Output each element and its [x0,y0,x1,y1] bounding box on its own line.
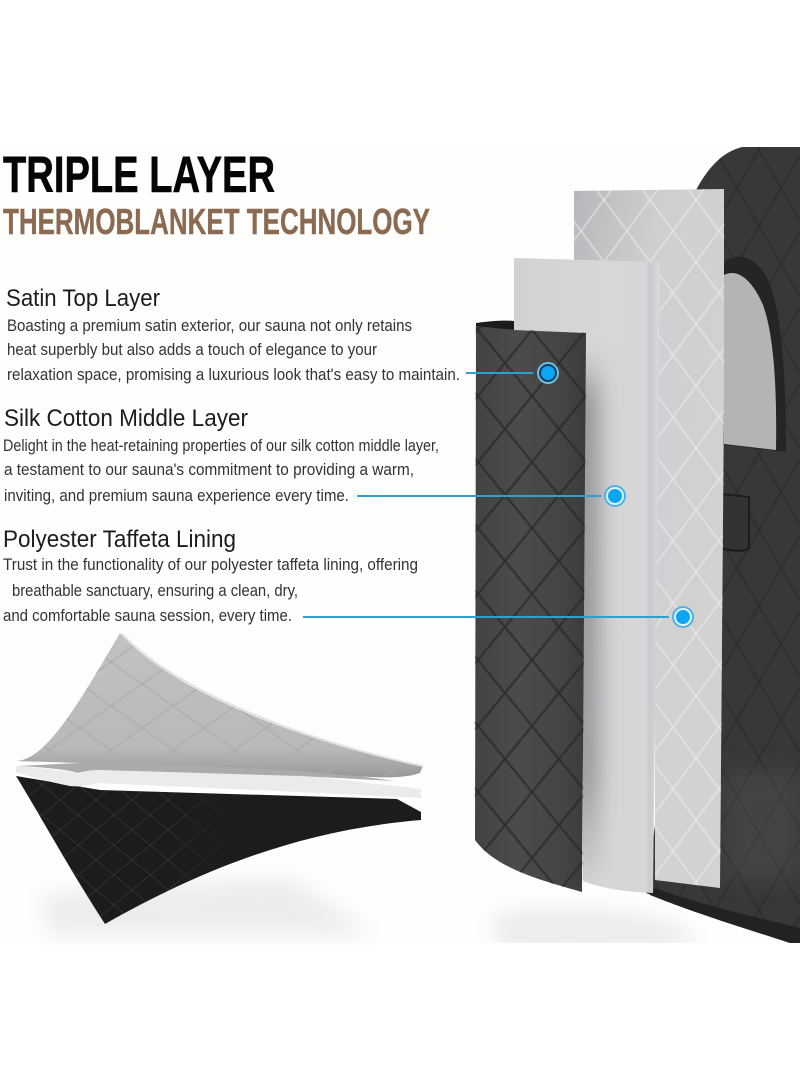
description: silk cotton middle layer: Delight in the heat-retaining properties of our silk cotton middle layer, [3,436,439,455]
fabric sheet: black lining [16,776,421,924]
description: satin top layer: Boasting a premium satin exterior, our sauna not only retains [7,316,412,335]
description: polyester taffeta lining: and comfortable sauna session, every time. [3,606,292,625]
shadow under fabric [40,878,375,935]
floor shadow [494,907,688,943]
subtitle: THERMOBLANKET TECHNOLOGY [3,201,430,242]
illustration: exploded fabric layers [16,633,423,935]
description: polyester taffeta lining [3,555,418,625]
sauna body [646,147,800,943]
heading: satin top layer: Satin Top Layer [6,285,160,312]
heading: polyester taffeta lining: Polyester Taffeta Lining [3,526,236,553]
text block: satin top layer [6,285,460,384]
text block: silk cotton middle layer [3,405,439,505]
sauna pocket [722,494,749,551]
layer panel: silk cotton middle layer [514,258,660,893]
description: silk cotton middle layer: a testament to our sauna's commitment to providing a warm, [4,460,414,479]
description: satin top layer: relaxation space, promising a luxurious look that's easy to maintain. [7,365,460,384]
callout: satin top layer [466,363,558,383]
layer panel: polyester taffeta lining [574,189,724,888]
description: polyester taffeta lining: breathable sanctuary, ensuring a clean, dry, [12,581,298,600]
callout: polyester taffeta lining [303,607,693,627]
description: silk cotton middle layer [3,436,439,505]
sauna window [724,257,786,452]
callout: silk cotton middle layer [357,486,625,506]
description: polyester taffeta lining: Trust in the functionality of our polyester taffeta lining, offering [3,555,418,574]
text block: polyester taffeta lining [3,526,418,625]
layer panel: satin top layer [475,321,586,892]
description: satin top layer [7,316,460,384]
heading: silk cotton middle layer: Silk Cotton Middle Layer [4,405,248,432]
illustration: sauna with layered panels [475,147,800,950]
fabric sheet: grey top [16,633,423,777]
description: silk cotton middle layer: inviting, and premium sauna experience every time. [4,486,349,505]
fabric sheet: white middle [16,766,421,798]
infographic canvas [3,147,800,943]
description: satin top layer: heat superbly but also adds a touch of elegance to your [7,340,377,359]
title: TRIPLE LAYER [3,146,275,203]
